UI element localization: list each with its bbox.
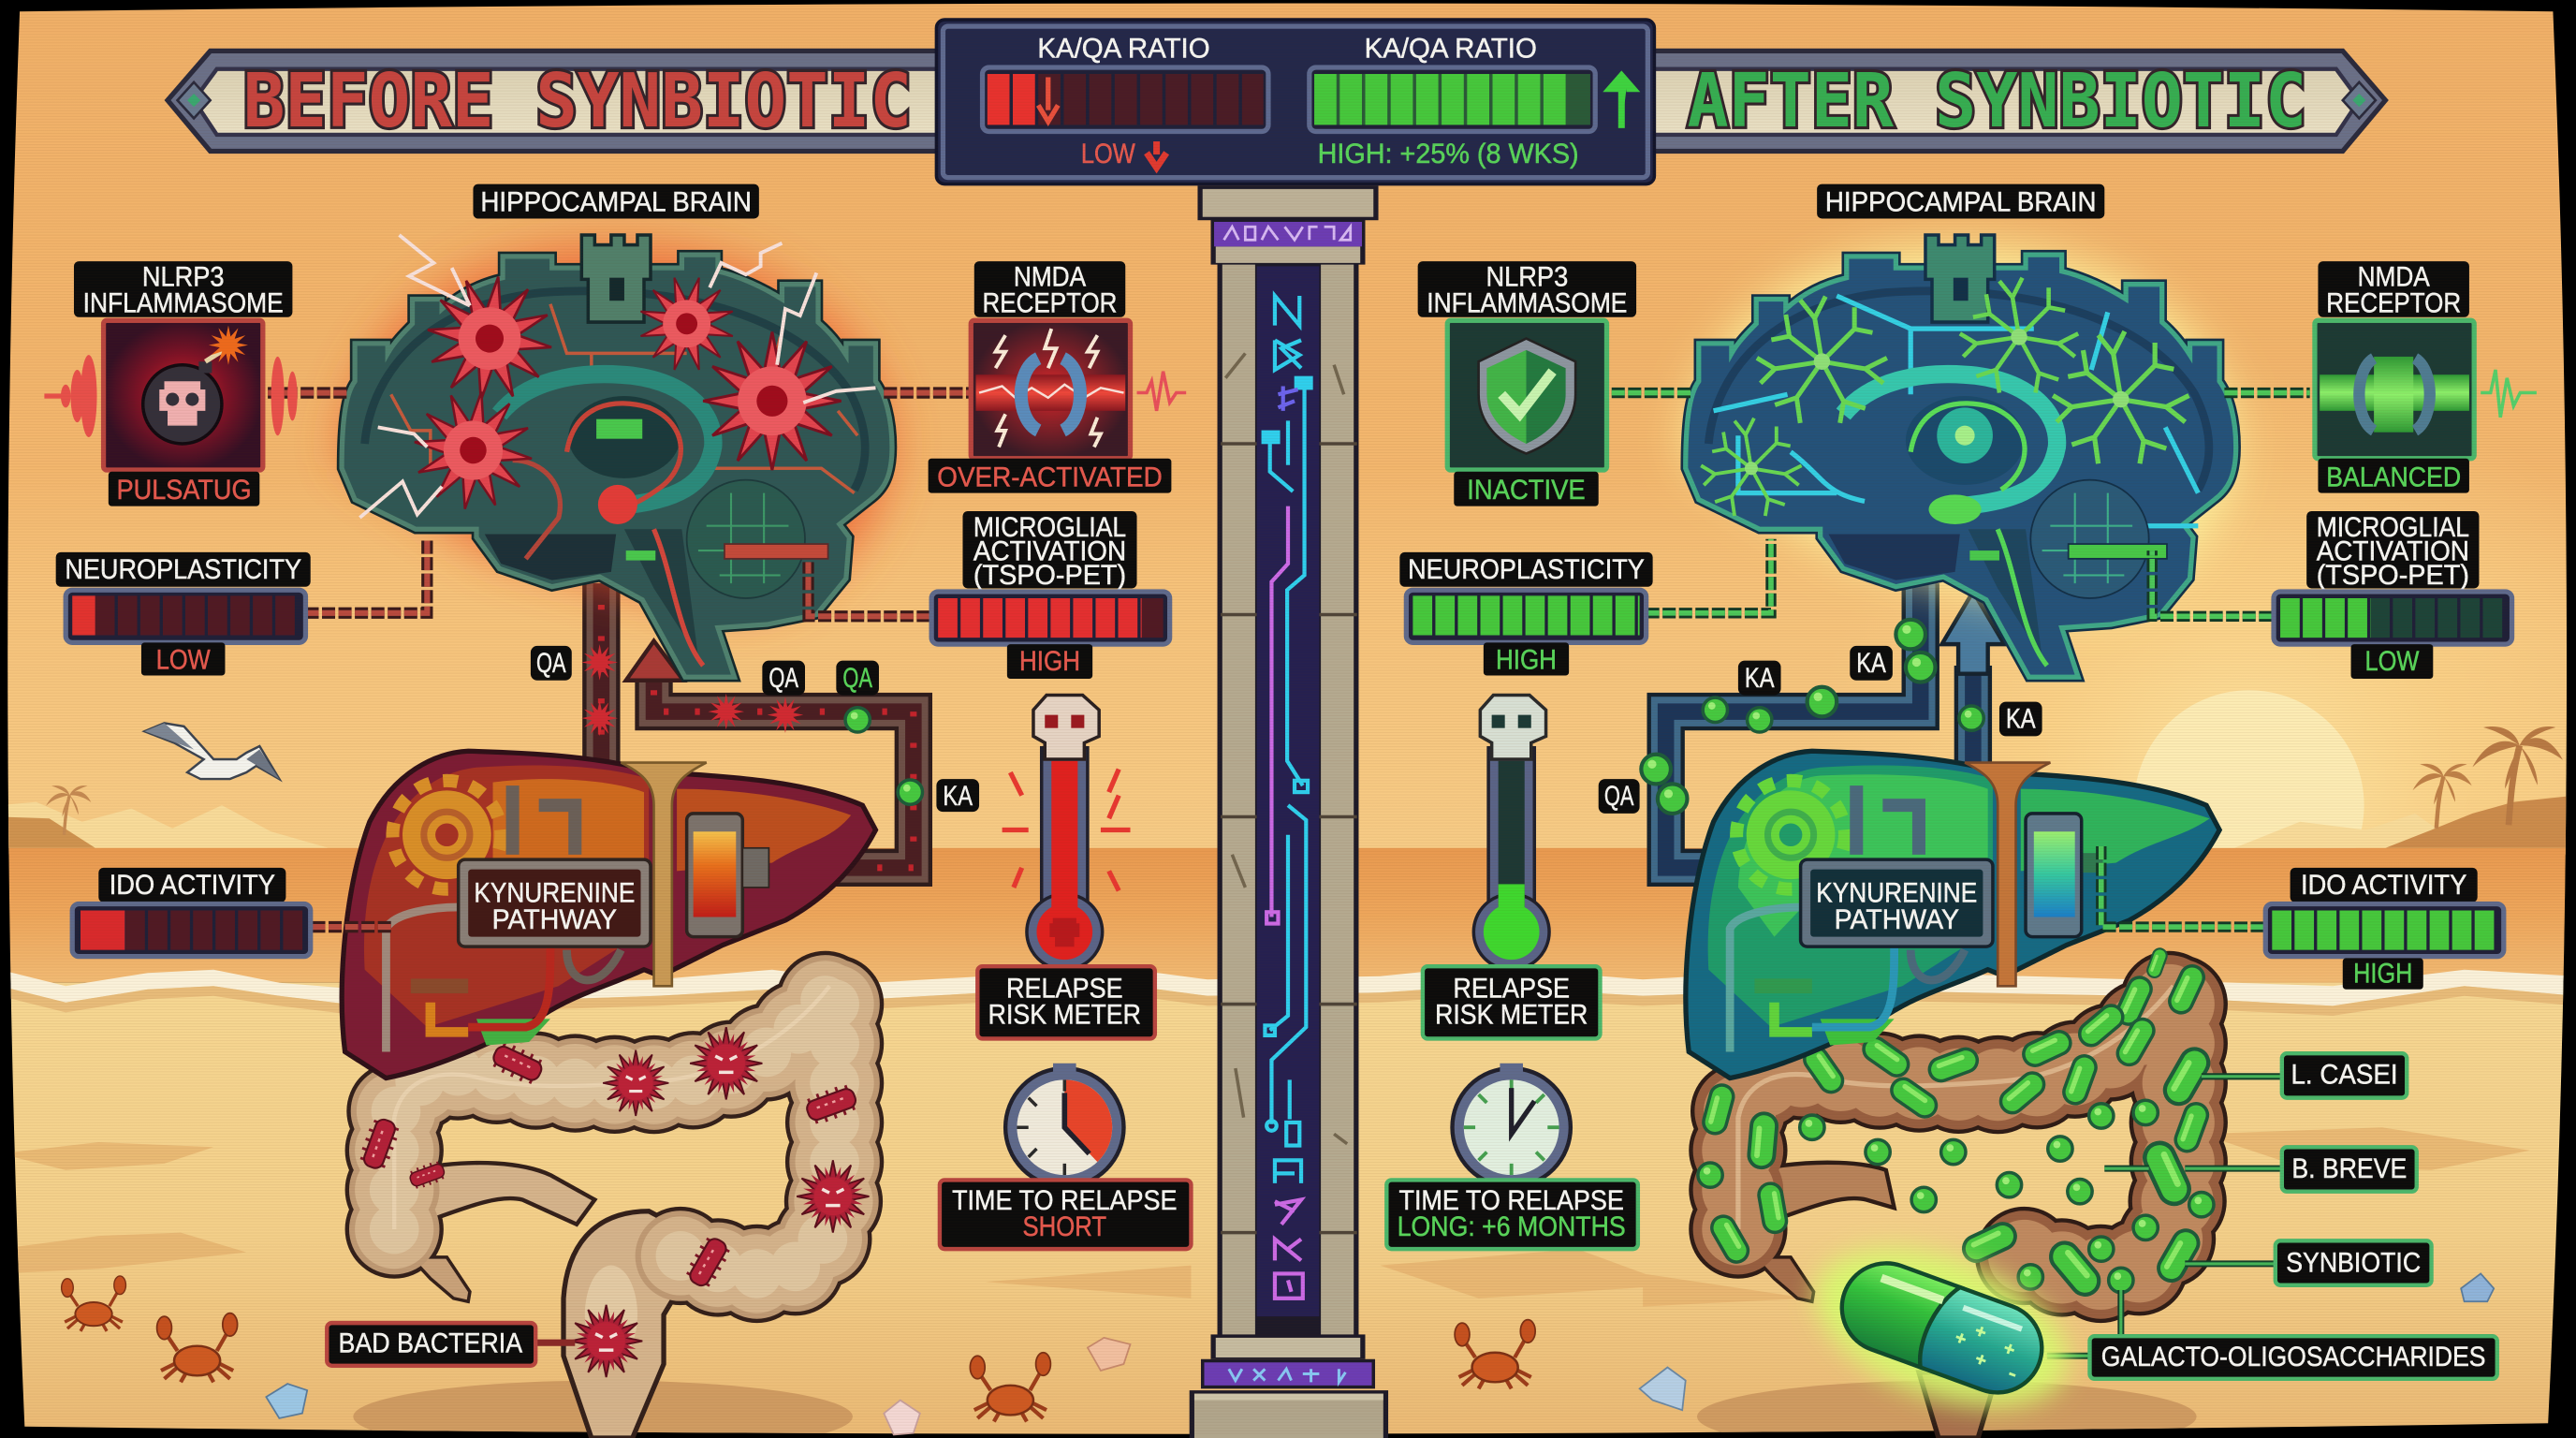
kynurenine label: KYNURENINE (1816, 878, 1977, 909)
ratio after: HIGH: +25% (8 WKS) (1318, 139, 1579, 169)
brain after (1686, 235, 2236, 677)
callout: L. casei (2282, 1053, 2407, 1098)
connector lines after (1612, 393, 2310, 927)
heading: NEUROPLASTICITY (1408, 554, 1645, 585)
panel: NLRP3 before (44, 261, 298, 506)
label: TIME TO RELAPSE (1398, 1185, 1624, 1216)
bar (2265, 903, 2504, 957)
heading: IDO ACTIVITY (110, 870, 275, 901)
waveform (1137, 372, 1186, 411)
heading: (TSPO-PET) (973, 560, 1126, 591)
nmda heading (2318, 261, 2469, 319)
pipes after (1641, 583, 2004, 868)
nlrp3 heading: INFLAMMASOME (83, 288, 284, 319)
ligament (1965, 763, 2050, 986)
heading: NEUROPLASTICITY (65, 554, 301, 585)
label: LONG: +6 MONTHS (1398, 1211, 1626, 1242)
ratio before: LOW (1081, 139, 1135, 169)
ratio after (1310, 33, 1633, 169)
meter: microglial after (2274, 511, 2512, 679)
arrow up (1942, 592, 2004, 674)
glow: after brain (1686, 246, 2236, 611)
relapse thermometer before (977, 696, 1155, 1038)
KA and QA tags after: QA (1604, 781, 1634, 812)
seagull (144, 723, 279, 779)
callout: galacto-oligosaccharides (2089, 1336, 2497, 1379)
header: after banner (1643, 51, 2385, 151)
cerebellum (626, 480, 828, 666)
status: over-activated: OVER-ACTIVATED (937, 462, 1163, 493)
green neurons (1701, 278, 2188, 516)
lightning (359, 235, 875, 518)
liver before (342, 751, 875, 1078)
label: TIME TO RELAPSE (952, 1185, 1178, 1216)
nlrp3 heading: INFLAMMASOME (1427, 288, 1627, 319)
KA and QA tags after: KA (1856, 648, 1886, 679)
status: pulsatug: PULSATUG (117, 475, 252, 506)
status: balanced: BALANCED (2326, 462, 2461, 493)
receptor icon (971, 320, 1131, 459)
label (940, 1180, 1191, 1249)
QA and KA tags before: QA (768, 663, 798, 694)
KA and QA tags after: KA (2006, 704, 2036, 735)
castle tower (1925, 235, 1995, 322)
meter: IDO before (72, 868, 311, 957)
skull top (1480, 696, 1546, 759)
nlrp3 heading (74, 261, 292, 319)
callout: bad bacteria (327, 1323, 575, 1366)
castle tower (581, 235, 651, 322)
panel: NMDA before (929, 261, 1186, 493)
rune plate bottom (1201, 1359, 1375, 1388)
kynurenine label (1801, 859, 1993, 946)
ligament (621, 763, 707, 986)
title before: BEFORE SYNBIOTIC (243, 58, 912, 144)
red neurons (406, 265, 842, 517)
bomb icon (104, 320, 263, 470)
liver after (1686, 751, 2219, 1078)
gear (1736, 781, 1845, 889)
status: LOW (156, 644, 211, 675)
pillar capital (1197, 185, 1379, 265)
relapse thermometer after (1423, 696, 1600, 1038)
ratio before (983, 33, 1268, 169)
waveform (2481, 370, 2537, 418)
status: HIGH (1019, 646, 1080, 677)
QA and KA tags before: KA (943, 781, 973, 812)
brain before (342, 235, 892, 677)
time to relapse before (940, 1064, 1191, 1249)
header: before banner (168, 51, 940, 151)
status: inactive: INACTIVE (1467, 475, 1586, 506)
receptor icon (2315, 320, 2474, 459)
nmda heading: NMDA (1014, 261, 1086, 292)
crabs and shells (62, 1273, 2494, 1434)
hippocampus (500, 374, 713, 559)
QA and KA tags before: QA (536, 648, 566, 679)
label: hippocampal brain before: HIPPOCAMPAL BRAIN (480, 187, 752, 218)
label: relapse risk meter (1423, 966, 1600, 1038)
jar (2026, 814, 2103, 937)
meter: IDO after (2265, 868, 2504, 990)
bad bacteria on colon (358, 1026, 871, 1379)
waveform (44, 355, 298, 437)
title after: AFTER SYNBIOTIC (1687, 58, 2306, 144)
shield icon (1447, 320, 1606, 470)
bar (931, 592, 1170, 644)
callout: synbiotic: SYNBIOTIC (2286, 1248, 2421, 1279)
label: relapse risk meter: RELAPSE (1006, 974, 1123, 1005)
bar (1406, 590, 1647, 642)
connector fill after (1612, 393, 2310, 927)
cerebellum (1969, 480, 2167, 666)
heading: ACTIVATION (2317, 536, 2469, 567)
dark lower lobe (1828, 535, 1960, 580)
bar (2274, 592, 2512, 644)
good bacteria capsules (1698, 946, 2214, 1300)
label: hippocampal brain after: HIPPOCAMPAL BRAIN (1825, 187, 2097, 218)
panel: KA/QA ratio (936, 20, 1654, 184)
ratio before: KA/QA RATIO (1037, 33, 1210, 64)
heading (2306, 511, 2479, 591)
rune plate top (1214, 222, 1362, 246)
callout: B. breve (2282, 1147, 2417, 1192)
callout leader lines (2047, 1077, 2280, 1356)
kynurenine label: PATHWAY (1835, 904, 1959, 935)
ratio after: KA/QA RATIO (1365, 33, 1537, 64)
connector lines before (268, 393, 970, 927)
nmda heading: RECEPTOR (983, 288, 1117, 319)
nlrp3 heading (1418, 261, 1636, 319)
nmda heading: RECEPTOR (2326, 288, 2461, 319)
time to relapse after (1386, 1064, 1638, 1249)
machine pipes (386, 785, 621, 1051)
capsule: synbiotic pill (1794, 1218, 2089, 1438)
pillar base (1190, 1390, 1388, 1438)
hippocampus (1843, 374, 2057, 524)
label: relapse risk meter: RISK METER (1435, 1000, 1588, 1031)
glow: before brain (342, 246, 892, 611)
pillar plinth (1211, 1334, 1365, 1359)
callout: galacto-oligosaccharides: GALACTO-OLIGOSACCHARIDES (2101, 1342, 2485, 1372)
heading (962, 511, 1137, 591)
center stone pillar (1190, 185, 1388, 1438)
arrow up (626, 641, 683, 681)
callout: bad bacteria: BAD BACTERIA (339, 1328, 522, 1359)
status: HIGH (2353, 959, 2412, 990)
nlrp3 heading: NLRP3 (1486, 261, 1568, 292)
meter: neuroplasticity before (56, 552, 311, 675)
label: relapse risk meter: RELAPSE (1453, 974, 1570, 1005)
machine pipes (1730, 785, 1965, 1051)
panel: NLRP3 after (1418, 261, 1636, 506)
kynurenine label: KYNURENINE (474, 878, 635, 909)
KA and QA tags after: KA (1745, 663, 1775, 694)
heading: MICROGLIAL (973, 512, 1126, 543)
kynurenine label: PATHWAY (492, 904, 617, 935)
bar (66, 590, 305, 642)
neon circuit screen (1257, 266, 1319, 1316)
pillar columns (1218, 263, 1358, 1338)
meter: microglial before (931, 511, 1170, 679)
jar (687, 814, 768, 937)
pipes before (581, 583, 922, 868)
heading: IDO ACTIVITY (2301, 870, 2466, 901)
skull top (1033, 696, 1099, 759)
clock (1005, 1064, 1123, 1186)
intestine after: brown colon (1738, 984, 2180, 1438)
status: HIGH (1496, 644, 1557, 675)
bar (72, 903, 311, 957)
QA and KA tags before: QA (842, 663, 872, 694)
KA and QA tags after (1599, 646, 2042, 814)
dark lower lobe (485, 535, 616, 580)
status (2351, 644, 2433, 679)
nmda heading (974, 261, 1125, 319)
panel: NMDA after (2315, 261, 2537, 493)
label: relapse risk meter: RISK METER (988, 1000, 1141, 1031)
meter: neuroplasticity after (1399, 552, 1653, 675)
heading: ACTIVATION (973, 536, 1126, 567)
label: relapse risk meter (977, 966, 1155, 1038)
label (1386, 1180, 1638, 1249)
callout: synbiotic (2276, 1240, 2432, 1285)
gear (392, 781, 501, 889)
kynurenine label (459, 859, 651, 946)
connector fill before (268, 393, 970, 927)
nmda heading: NMDA (2358, 261, 2430, 292)
callout: L. casei: L. CASEI (2291, 1060, 2398, 1091)
clock (1453, 1064, 1571, 1186)
status: LOW (2364, 646, 2420, 677)
heading: (TSPO-PET) (2317, 560, 2469, 591)
callout: B. breve: B. BREVE (2291, 1153, 2407, 1184)
nlrp3 heading: NLRP3 (142, 261, 225, 292)
intestine before: tan colon (358, 984, 871, 1438)
label: SHORT (1023, 1211, 1106, 1242)
heading: MICROGLIAL (2317, 512, 2469, 543)
callout leader fill (2047, 1077, 2280, 1356)
QA and KA tags before (531, 646, 979, 812)
